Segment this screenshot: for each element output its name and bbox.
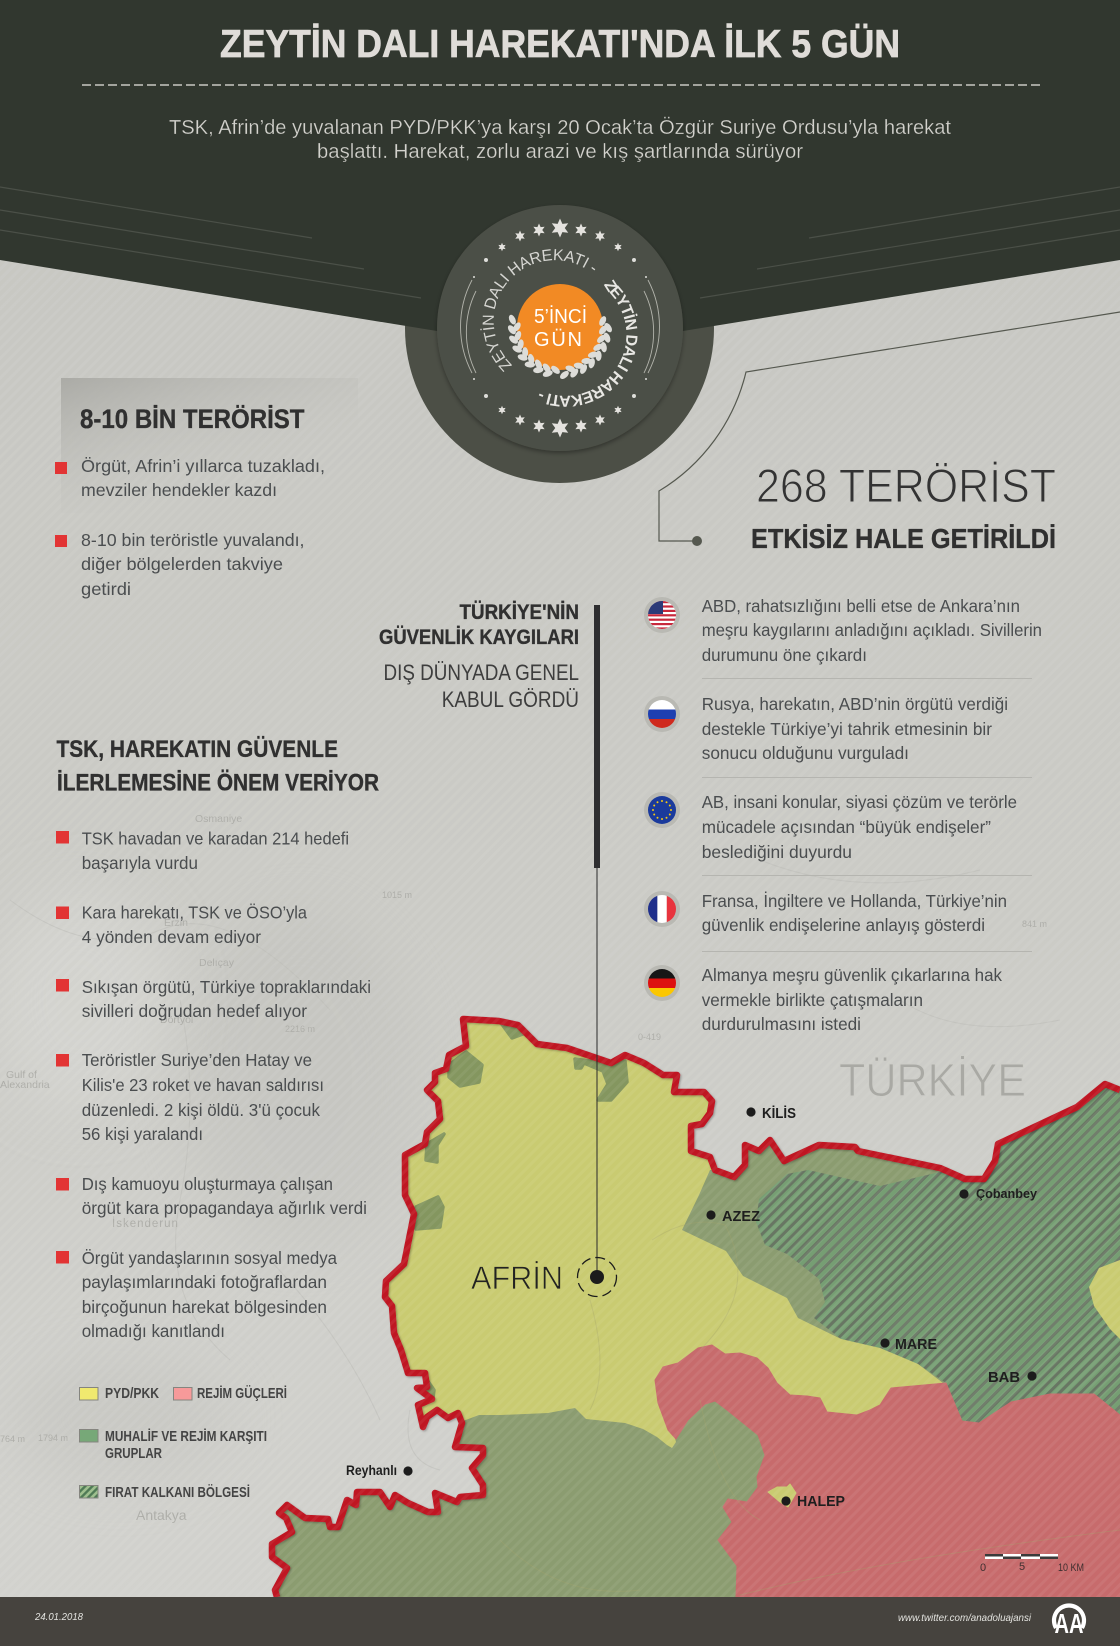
- city: Kilis: KİLİS: [762, 1105, 796, 1122]
- bullet: Sıkışan örgütü, Türkiye topraklarındaki: [82, 977, 371, 997]
- day label: [534, 305, 587, 351]
- title: ZEYTİN DALI HAREKATI'NDA İLK 5 GÜN: [220, 23, 900, 66]
- map label: Türkiye: TÜRKİYE: [839, 1054, 1026, 1106]
- scale bar: 0: [980, 1562, 986, 1574]
- bullet: [56, 1050, 324, 1144]
- stars ring: [473, 218, 647, 438]
- text: Germany: [702, 965, 1002, 1034]
- text: USA: durumunu öne çıkardı: [702, 645, 867, 665]
- bullet: Dış kamuoyu oluşturmaya çalışan: [82, 1174, 333, 1194]
- text: USA: meşru kaygılarını anladığını açıkladı. Sivillerin: [702, 620, 1042, 640]
- bullet: Teröristler Suriye’den Hatay ve: [82, 1050, 312, 1070]
- orange centre: [517, 284, 603, 370]
- bullet: [56, 1248, 337, 1341]
- text: France: güvenlik endişelerine anlayış gösterdi: [702, 915, 985, 935]
- text: Germany: Almanya meşru güvenlik çıkarlarına hak: [702, 965, 1002, 985]
- text: Germany: durdurulmasını istedi: [702, 1014, 861, 1034]
- heading: Türkiye güvenlik kaygıları: GÜVENLİK KAYGILARI: [379, 626, 579, 649]
- zone: PYD/PKK east patch: [1089, 1260, 1120, 1339]
- city: Azez: [706, 1208, 760, 1225]
- faint map labels: Alexandria: [0, 1079, 50, 1091]
- city: Mare: MARE: [895, 1336, 937, 1353]
- opposition patches inside Afrin: [416, 1023, 627, 1398]
- footer: [0, 1597, 1120, 1646]
- bullet: sivilleri doğrudan hedef alıyor: [82, 1001, 307, 1021]
- text: Russia: destekle Türkiye’yi tahrik etmesinin bir: [702, 719, 992, 739]
- callout: 268 terörist: 268 TERÖRİST: [756, 459, 1056, 512]
- bullet 1: Örgüt, Afrin’i yıllarca tuzakladı,: [81, 456, 325, 476]
- bullet 2: [55, 530, 304, 599]
- faint map labels: Delıçay: [199, 957, 235, 969]
- zone: opposition groups: [275, 1146, 946, 1597]
- legend: opposition: MUHALİF VE REJİM KARŞITI: [105, 1428, 267, 1445]
- icon: France flag: [644, 891, 680, 927]
- date: 24.01.2018: [34, 1612, 83, 1623]
- city: Reyhanlı: Reyhanlı: [346, 1463, 397, 1478]
- text: Germany: vermekle birlikte çatışmaların: [702, 990, 923, 1010]
- faint map labels: 1794 m: [38, 1433, 68, 1443]
- legend: PYD/PKK: PYD/PKK: [105, 1385, 159, 1402]
- legend: opposition: GRUPLAR: [105, 1445, 162, 1462]
- bullet: başarıyla vurdu: [82, 853, 198, 873]
- bullet 2: diğer bölgelerden takviye: [81, 554, 283, 574]
- bullet 1: [55, 456, 325, 500]
- icon: US flag: [644, 597, 680, 633]
- day label: 5’İNCİ: [534, 305, 587, 328]
- bullet: Kilis'e 23 roket ve havan saldırısı: [82, 1075, 324, 1095]
- logo: AA: AA: [1054, 1608, 1084, 1639]
- text: France: Fransa, İngiltere ve Hollanda, Türkiye’nin: [702, 891, 1007, 911]
- text: Russia: sonucu olduğunu vurguladı: [702, 743, 909, 763]
- bullet: TSK havadan ve karadan 214 hedefi: [82, 828, 349, 848]
- outer medallion circle: [405, 174, 714, 483]
- bullet 1: mevziler hendekler kazdı: [81, 480, 277, 500]
- bullet 2: getirdi: [81, 579, 131, 599]
- zone: Euphrates Shield hatched: [756, 1088, 1120, 1422]
- legend: [80, 1385, 287, 1501]
- text: EU: AB, insani konular, siyasi çözüm ve terörle: [702, 792, 1017, 812]
- map label: Afrin: AFRİN: [471, 1260, 563, 1296]
- faint map labels: Gulf of: [6, 1069, 37, 1081]
- faint map labels: 1015 m: [382, 890, 412, 900]
- circular text bold: ZEYTİN DALI HAREKATI -: [538, 280, 638, 407]
- legend: Euphrates Shield: FIRAT KALKANI BÖLGESİ: [105, 1484, 250, 1501]
- bullet: örgüt kara propagandaya ağırlık verdi: [82, 1198, 367, 1218]
- icon: EU flag: [644, 792, 680, 828]
- panel: international reactions: [644, 596, 1042, 1034]
- day label: GÜN: [534, 329, 582, 351]
- icon: Germany flag: [644, 965, 680, 1001]
- zone: PYD/PKK Aleppo patch: [768, 1484, 796, 1507]
- bullet: [56, 902, 307, 947]
- city: Bab: [988, 1369, 1037, 1386]
- icon: Russia flag: [644, 696, 680, 732]
- callout: 268 terörist: ETKİSİZ HALE GETİRİLDİ: [751, 523, 1056, 554]
- text: Russia: [702, 694, 1008, 763]
- city: Kilis: [746, 1105, 796, 1122]
- bullet: 56 kişi yaralandı: [82, 1124, 203, 1144]
- faint map labels: 841 m: [1022, 919, 1047, 929]
- scale bar: [980, 1554, 1084, 1574]
- bullet 2: 8-10 bin teröristle yuvalandı,: [81, 530, 304, 550]
- faint map labels: 0-419: [638, 1032, 661, 1042]
- text: EU: beslediğini duyurdu: [702, 842, 852, 862]
- bullet: düzenledi. 2 kişi öldü. 3'ü çocuk: [82, 1100, 320, 1120]
- heading: 8-10 BİN TERÖRİST: [80, 404, 305, 434]
- side arcs: [461, 280, 659, 373]
- city: Çobanbey: Çobanbey: [976, 1186, 1038, 1201]
- callout: 268 terörist: [751, 459, 1056, 554]
- faint map labels: Antakya: [136, 1507, 187, 1523]
- list: TSK bullets: [56, 828, 371, 1341]
- heading: TSK: TSK, HAREKATIN GÜVENLE: [56, 736, 338, 763]
- header band: [0, 0, 1120, 331]
- bullet: Örgüt yandaşlarının sosyal medya: [82, 1248, 337, 1268]
- legend: PYD/PKK: [80, 1385, 159, 1402]
- bullet: Kara harekatı, TSK ve ÖSO’yla: [82, 902, 307, 922]
- text: EU: [702, 792, 1017, 862]
- twitter link: www.twitter.com/anadoluajansi: [898, 1612, 1032, 1624]
- zone: regime forces: [655, 1345, 1120, 1597]
- heading: Türkiye güvenlik kaygıları: TÜRKİYE'NİN: [460, 601, 579, 624]
- bullet: olmadığı kanıtlandı: [82, 1321, 225, 1341]
- faint map labels: İskenderun: [112, 1217, 179, 1230]
- zone: PYD/PKK Afrin: [380, 1000, 943, 1448]
- logo: AA: [1054, 1606, 1084, 1639]
- text: Russia: Rusya, harekatın, ABD’nin örgütü verdiği: [702, 694, 1008, 714]
- text: USA: ABD, rahatsızlığını belli etse de Ankara’nın: [702, 596, 1020, 616]
- legend: regime forces: [174, 1385, 287, 1402]
- text: EU: mücadele açısından “büyük endişeler”: [702, 817, 991, 837]
- bullet: paylaşımlarındaki fotoğraflardan: [82, 1272, 327, 1292]
- panel: 8-10 bin terörist: [55, 378, 358, 599]
- legend: regime forces: REJİM GÜÇLERİ: [197, 1385, 287, 1402]
- faint map labels: Erzin: [164, 917, 188, 929]
- wreath: [506, 313, 614, 381]
- city: Azez: AZEZ: [722, 1208, 760, 1225]
- scale bar: 10 KM: [1058, 1562, 1084, 1574]
- heading: Türkiye güvenlik kaygıları: KABUL GÖRDÜ: [442, 687, 579, 712]
- subtitle: başlattı. Harekat, zorlu arazi ve kış şartlarında sürüyor: [317, 141, 803, 163]
- bullet: [56, 1174, 367, 1218]
- bullet: birçoğunun harekat bölgesinden: [82, 1297, 327, 1317]
- bullet: 4 yönden devam ediyor: [82, 927, 261, 947]
- connector dot: [692, 536, 702, 546]
- city: Bab: BAB: [988, 1369, 1020, 1386]
- city: Halep: HALEP: [797, 1493, 845, 1510]
- heading: TSK: İLERLEMESİNE ÖNEM VERİYOR: [57, 770, 379, 796]
- pointer bar to Afrin: [594, 605, 600, 1277]
- dashed divider: [82, 84, 1040, 86]
- scale bar: 5: [1019, 1561, 1025, 1573]
- bullet: [56, 828, 349, 873]
- heading: Türkiye güvenlik kaygıları: [379, 601, 579, 712]
- map label: Afrin: [471, 1258, 616, 1296]
- circular text: ZEYTİN DALI HAREKATI -: [480, 249, 596, 372]
- subtitle: TSK, Afrin’de yuvalanan PYD/PKK’ya karşı 20 Ocak’ta Özgür Suriye Ordusu’yla harekat: [169, 117, 951, 139]
- subtitle: [169, 117, 951, 163]
- connector line: [659, 312, 1120, 541]
- text: France: [702, 891, 1007, 935]
- legend: Euphrates Shield: [80, 1484, 250, 1501]
- faint map labels: [0, 813, 1047, 1523]
- map: conflict zones: [260, 1000, 1120, 1597]
- faint map labels: 764 m: [0, 1434, 25, 1444]
- border: Turkey-Syria: [272, 1019, 1120, 1597]
- heading: TSK: [56, 736, 379, 796]
- text: USA: [702, 596, 1042, 665]
- faint map labels: 2216 m: [285, 1024, 315, 1034]
- heading: Türkiye güvenlik kaygıları: DIŞ DÜNYADA GENEL: [384, 660, 579, 685]
- faint map labels: Osmaniye: [195, 813, 242, 825]
- legend: opposition: [80, 1428, 267, 1462]
- medallion: [436, 205, 684, 454]
- faint map labels: Dörtyol: [160, 1014, 193, 1026]
- bullet: [56, 977, 371, 1021]
